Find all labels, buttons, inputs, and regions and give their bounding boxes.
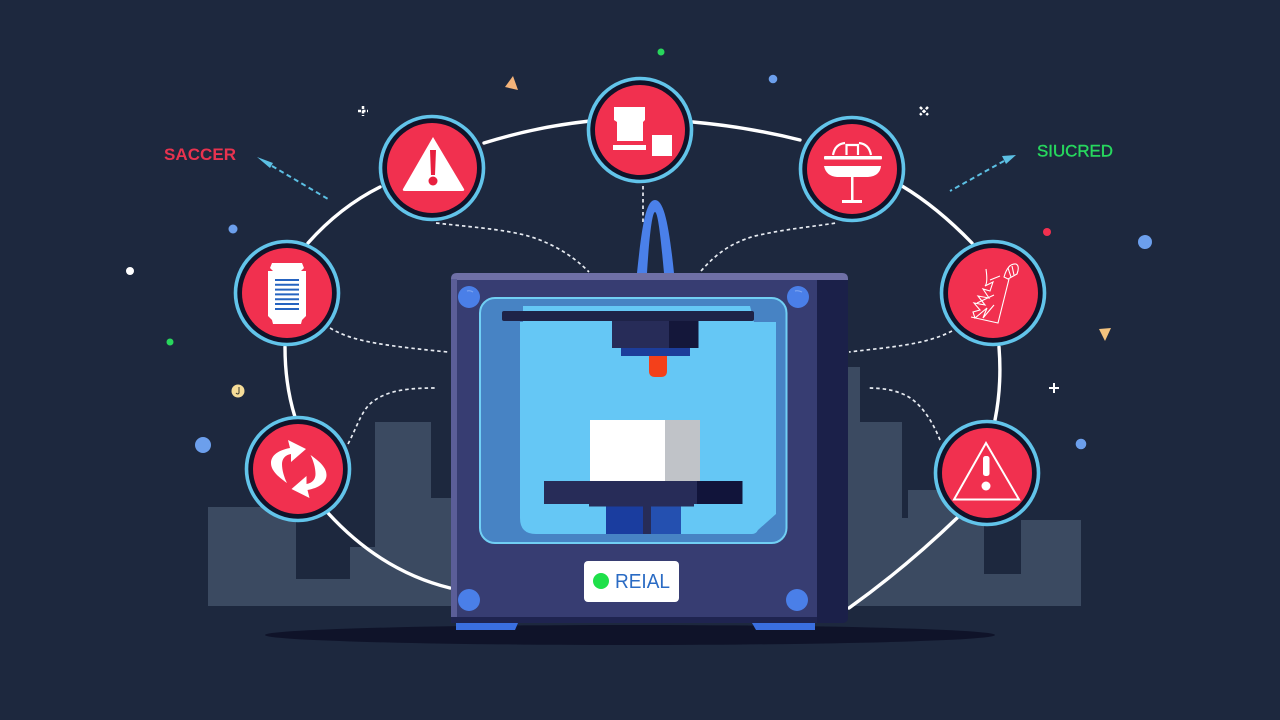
filament loop bbox=[637, 200, 674, 273]
label: SIUCRED: SIUCRED bbox=[1037, 142, 1113, 160]
node: handwritten scroll bbox=[942, 242, 1044, 344]
arrow: left dashed pointer bbox=[257, 157, 328, 199]
3D printer bbox=[451, 273, 848, 630]
circular connection ring bbox=[285, 121, 1000, 608]
status label: REIAL bbox=[615, 571, 670, 593]
node: document canister bbox=[236, 242, 338, 344]
label: SACCER: SACCER bbox=[164, 145, 236, 164]
printer window bbox=[480, 298, 786, 543]
node: dish on stand bbox=[800, 118, 904, 220]
corner screws bbox=[458, 286, 809, 611]
printer body bbox=[451, 273, 848, 623]
node: recycle arrows bbox=[246, 418, 350, 520]
print head bbox=[612, 321, 698, 377]
printed cube bbox=[590, 420, 700, 481]
decorative particles bbox=[126, 48, 1152, 453]
gantry rail bbox=[502, 311, 754, 321]
dashed connectors to printer bbox=[330, 186, 952, 444]
skyline: right buildings bbox=[848, 367, 1081, 606]
ground shadow bbox=[265, 625, 995, 645]
node: spool and cube bbox=[588, 78, 692, 182]
skyline: left buildings bbox=[208, 422, 452, 606]
node: warning triangle bbox=[380, 116, 484, 220]
arrow: right dashed pointer bbox=[950, 155, 1016, 191]
node: outlined warning triangle bbox=[936, 422, 1038, 524]
status label bbox=[584, 561, 679, 602]
printer feet bbox=[456, 623, 815, 630]
build plate bbox=[544, 481, 742, 534]
